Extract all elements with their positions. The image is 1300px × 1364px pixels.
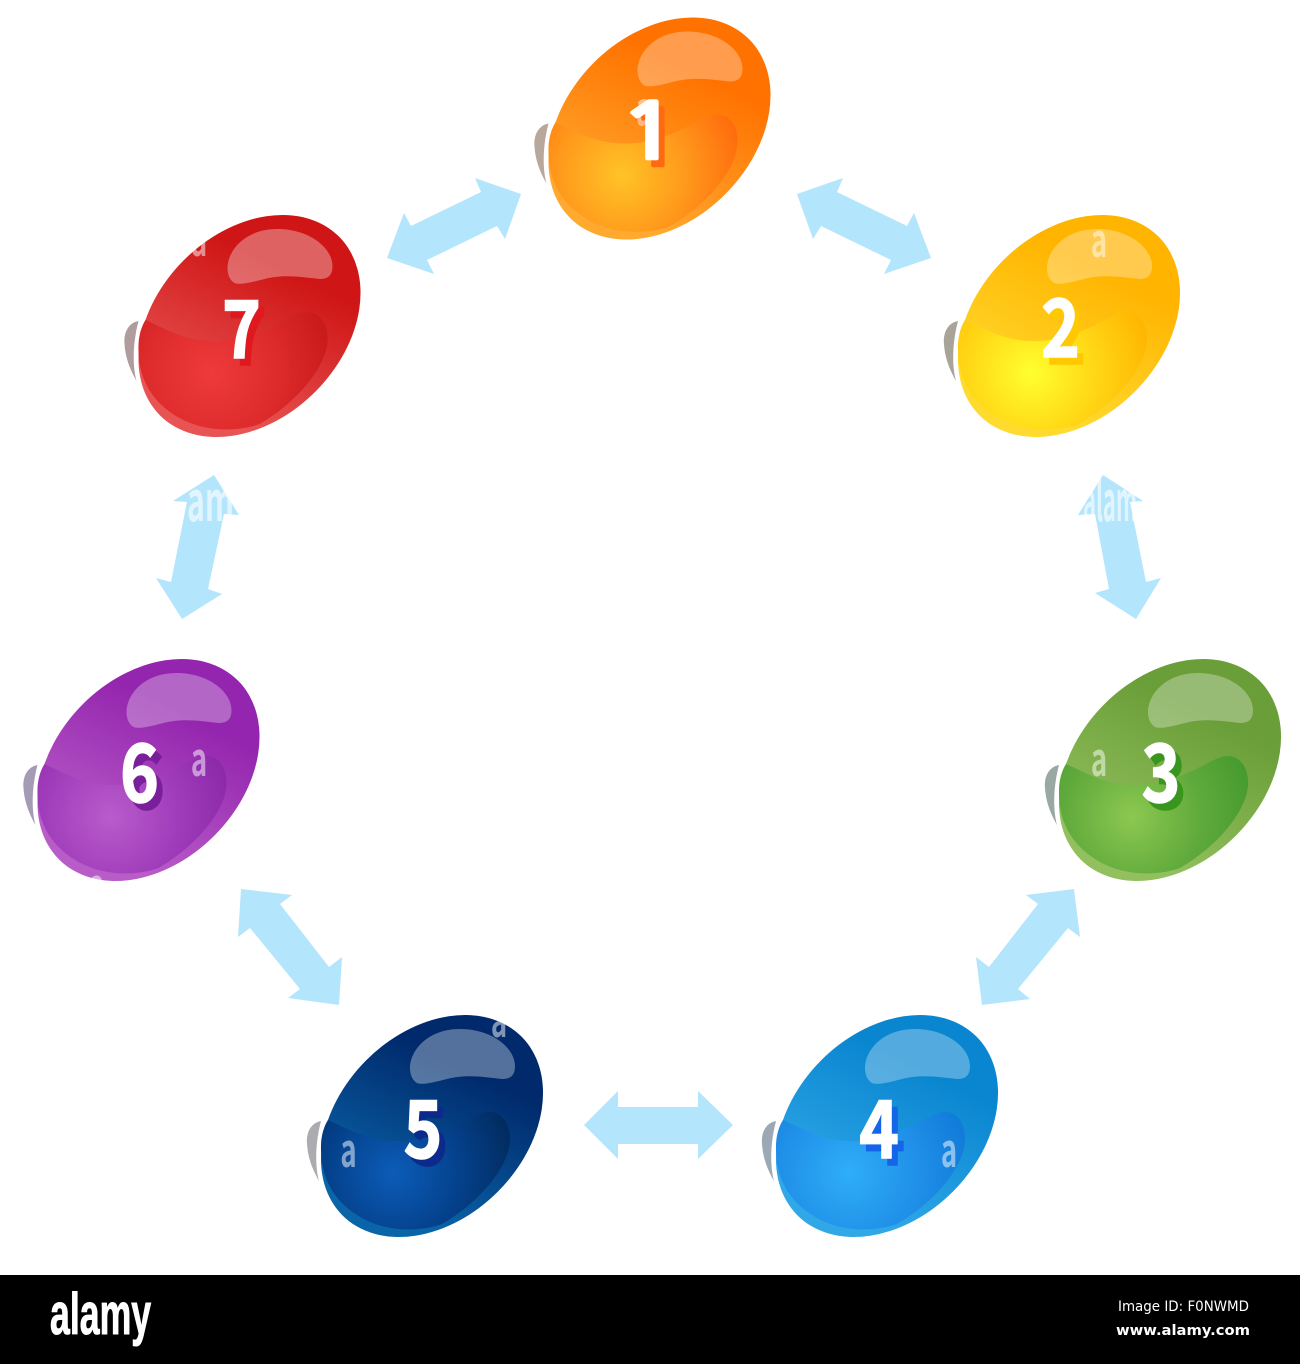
bubble 6: purple: 6: [120, 710, 159, 826]
watermark on arrow 2-3: alam: [1083, 458, 1137, 538]
arrow: bubble 3 to 4: [976, 889, 1080, 1005]
watermark on arrow 6-7: am: [187, 458, 234, 537]
arrow: bubble 1 to 2: [797, 178, 931, 274]
footer bar: [0, 1275, 1300, 1364]
bubble 5: navy: a: [340, 1114, 357, 1180]
bubble 6: purple: a: [88, 849, 105, 915]
bubble 3: green: 3: [1142, 710, 1180, 826]
bubble 7: red: [94, 171, 405, 481]
bubble 2: yellow: 2: [1047, 272, 1086, 388]
bubble 6: purple: a: [191, 723, 207, 789]
image id: Image ID: F0NWMD: [1118, 1299, 1249, 1315]
arrow: bubble 4 to 5: [584, 1091, 733, 1159]
bubble 2: yellow: 2: [1041, 265, 1080, 381]
bubble 4: light blue: a: [941, 1114, 957, 1180]
bubble 5: navy: [277, 971, 587, 1281]
bubble 1: orange: 1: [618, 94, 681, 171]
bubble 1: orange: 1: [624, 101, 687, 178]
bubble 4: light blue: [732, 971, 1042, 1281]
bubble 1: orange: [504, 0, 815, 284]
bubble 5: navy: a: [491, 984, 507, 1050]
bubble 1: orange: a: [636, 72, 652, 139]
bubble 5: navy: 5: [410, 1073, 448, 1189]
bubble 3: green: 3: [1148, 717, 1186, 833]
bubble 4: light blue: 4: [865, 1073, 905, 1189]
bubble 3: green: [1015, 615, 1300, 925]
bubble 5: navy: 5: [404, 1066, 442, 1182]
bubble 4: light blue: 4: [859, 1066, 899, 1182]
arrow: bubble 5 to 6: [238, 889, 342, 1005]
arrow: bubble 2 to 3: [1078, 475, 1161, 619]
footer logo: alamy: [50, 1282, 151, 1347]
bubble 6: purple: [0, 615, 304, 925]
arrows: two-way links between bubbles: [156, 178, 1161, 1159]
bubble 3: green: a: [1091, 723, 1107, 789]
website: www.alamy.com: [1116, 1323, 1250, 1339]
bubble 6: purple: 6: [126, 717, 165, 833]
bubble 7: red: a: [191, 203, 207, 269]
arrow: bubble 6 to 7: [156, 475, 239, 619]
bubble 7: red: 7: [228, 273, 267, 389]
arrow: bubble 7 to 1: [387, 178, 521, 274]
bubble 7: red: 7: [222, 266, 261, 382]
bubble 2: yellow: a: [1091, 204, 1107, 270]
bubble 2: yellow: [914, 171, 1224, 481]
